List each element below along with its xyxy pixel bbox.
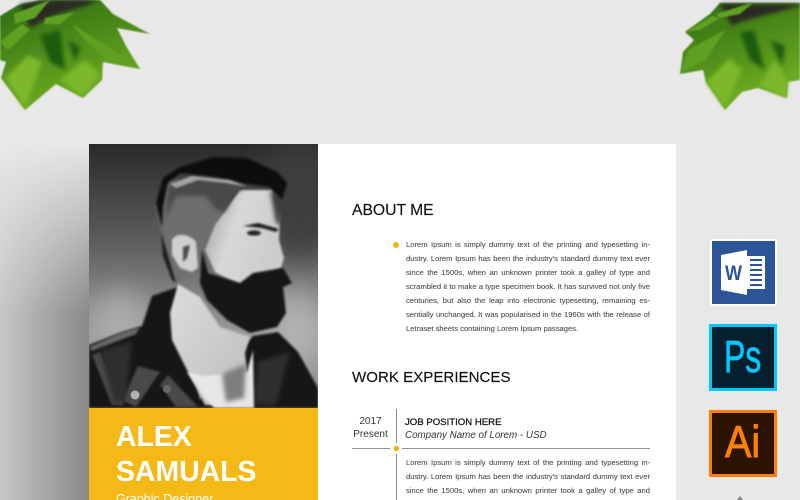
- icon: illustrator: Ai: [725, 417, 760, 467]
- dates: Present: [353, 428, 388, 440]
- paper shadow: [0, 144, 89, 500]
- resume paper: [89, 144, 676, 500]
- about text: scrambled it to make a type specimen book. It has survived not only five: [406, 282, 650, 291]
- neck: [170, 284, 250, 405]
- icon: word: [710, 239, 777, 306]
- job text: Lorem Ipsum is simply dummy text of the printing and typesetting in-: [406, 458, 650, 467]
- about text: Lorem Ipsum is simply dummy text of the printing and typesetting in-: [406, 240, 650, 249]
- name: ALEX: [116, 421, 192, 453]
- jacket: [89, 287, 318, 408]
- name panel: [89, 408, 318, 500]
- beard: [200, 250, 292, 333]
- icon: photoshop: Ps: [724, 331, 761, 382]
- portrait photo: [89, 144, 318, 408]
- dates: [353, 416, 388, 440]
- about text: dustry. Lorem Ipsum has been the industry's standard dummy text ever: [406, 254, 650, 263]
- job text: [406, 458, 650, 495]
- leaf: top left: [0, 0, 150, 111]
- icon: photoshop: [709, 324, 777, 391]
- heading: about me: ABOUT ME: [352, 202, 434, 219]
- company name: Company Name of Lorem - USD: [405, 430, 547, 441]
- face: [205, 190, 284, 285]
- name: [116, 421, 256, 488]
- icon: partial tip: [737, 496, 743, 500]
- hair: [156, 157, 287, 227]
- dates: 2017: [359, 416, 382, 427]
- job position: JOB POSITION HERE: [405, 417, 502, 428]
- about text: since the 1500s, when an unknown printer took a galley of type and: [406, 268, 650, 277]
- about text: Letraset sheets containing Lorem Ipsum passages.: [406, 324, 578, 333]
- job text: since the 1500s, when an unknown printer took a galley of type and: [406, 486, 650, 495]
- shaved side: [157, 180, 225, 283]
- icon: word: W: [725, 262, 742, 285]
- leaf: top right: [679, 0, 800, 111]
- timeline: [352, 409, 650, 500]
- about text: sentially unchanged. It was popularised in the 1960s with the release of: [406, 310, 650, 319]
- ear: [172, 235, 198, 272]
- heading: work experiences: WORK EXPERIENCES: [352, 369, 511, 386]
- name: SAMUALS: [116, 456, 256, 488]
- bullet: [393, 242, 399, 248]
- icon: illustrator: [709, 410, 777, 477]
- about text: centuries, but also the leap into electronic typesetting, remaining es-: [406, 296, 650, 305]
- job text: dustry. Lorem Ipsum has been the industry's standard dummy text ever: [406, 472, 650, 481]
- about text: [406, 240, 650, 333]
